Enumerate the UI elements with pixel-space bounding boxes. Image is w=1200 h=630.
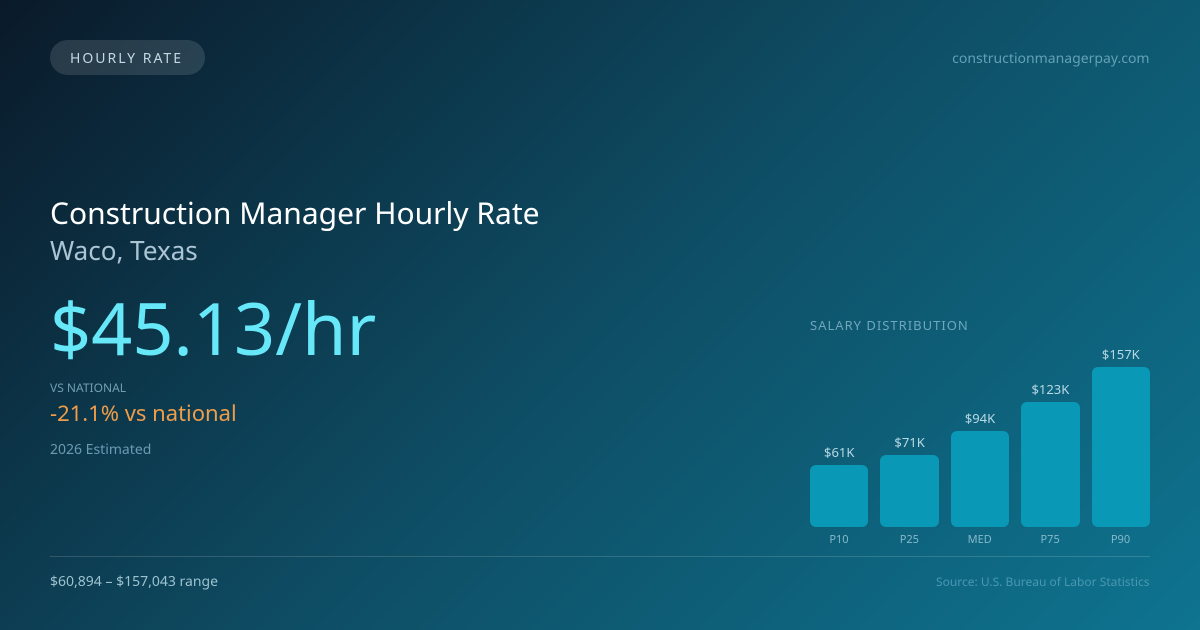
chart heading: SALARY DISTRIBUTION bbox=[810, 316, 969, 334]
value: P25: $71K bbox=[894, 433, 925, 451]
bar: P90 bbox=[1092, 367, 1150, 527]
bar: P25 bbox=[880, 455, 939, 527]
axis label: P90: P90 bbox=[1111, 532, 1130, 547]
value: P10: $61K bbox=[824, 443, 854, 461]
title: Construction Manager Hourly Rate bbox=[50, 192, 540, 233]
value: P90: $157K bbox=[1102, 345, 1140, 363]
axis label: P75: P75 bbox=[1040, 532, 1060, 547]
badge: hourly rate bbox=[50, 40, 205, 75]
axis label: median: MED bbox=[968, 532, 992, 547]
comparison value: -21.1% vs national bbox=[50, 398, 237, 428]
comparison label: VS NATIONAL bbox=[50, 379, 126, 396]
source: Source: U.S. Bureau of Labor Statistics bbox=[936, 573, 1150, 590]
axis label: P10: P10 bbox=[829, 532, 849, 547]
axis label: P25: P25 bbox=[900, 532, 919, 547]
footer rule bbox=[50, 556, 1150, 557]
bar: P10 bbox=[810, 465, 868, 527]
main hourly figure: $45.13/hr bbox=[50, 279, 376, 377]
value: P75: $123K bbox=[1031, 380, 1069, 398]
location subtitle: Waco, Texas bbox=[50, 232, 198, 268]
site domain: constructionmanagerpay.com bbox=[952, 49, 1150, 68]
bar: median bbox=[951, 431, 1009, 527]
badge label: HOURLY RATE bbox=[70, 49, 183, 68]
estimate note: 2026 Estimated bbox=[50, 440, 151, 459]
salary range: $60,894 – $157,043 range bbox=[50, 572, 218, 591]
value: median: $94K bbox=[965, 409, 995, 427]
bar: P75 bbox=[1021, 402, 1080, 527]
